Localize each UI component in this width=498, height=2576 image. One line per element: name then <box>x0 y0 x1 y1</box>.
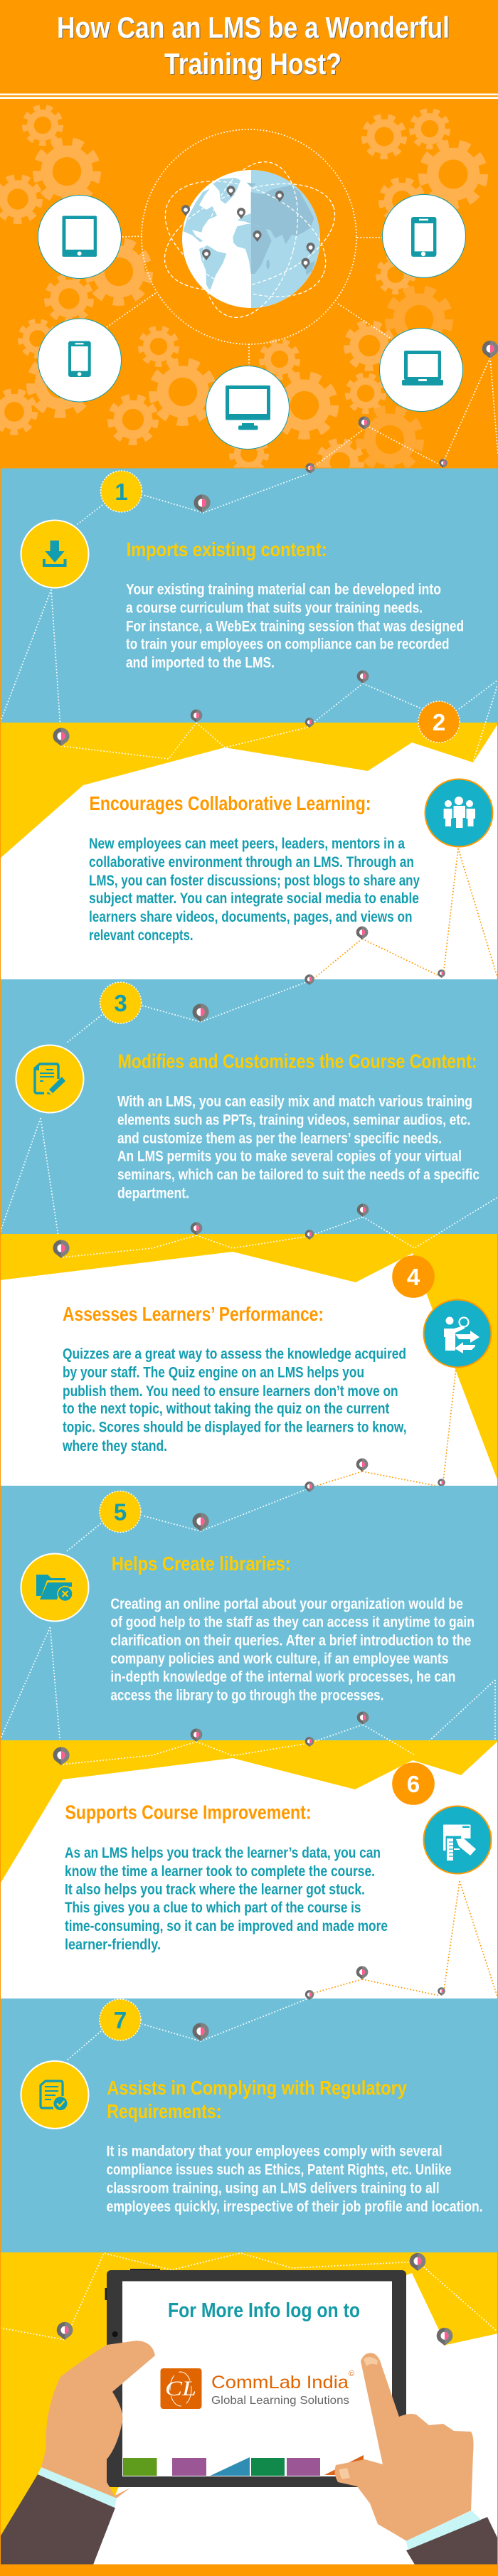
panel: section 3 modifies and customizes <box>0 974 498 1241</box>
body text: New employees can meet peers, leaders, mentors in a <box>89 836 405 852</box>
body text: time-consuming, so it can be improved and made more <box>65 1918 388 1934</box>
body text: collaborative environment through an LMS. Through an <box>89 854 414 871</box>
body text <box>126 582 464 671</box>
number 5 badge <box>100 1491 141 1532</box>
number 4 badge <box>393 1256 434 1297</box>
body text: As an LMS helps you track the learner’s data, you can <box>65 1845 381 1861</box>
number 6 badge <box>393 1763 434 1804</box>
panel: section 5 helps create libraries <box>0 1481 498 1755</box>
number 3 badge <box>100 982 142 1023</box>
number 1 badge: 1 <box>115 479 128 505</box>
body text: know the time a learner took to complete the course. <box>65 1863 375 1880</box>
body text <box>65 1845 388 1953</box>
logo <box>161 2368 354 2409</box>
body text: and imported to the LMS. <box>126 654 275 671</box>
logo: CL <box>165 2377 196 2400</box>
body text: Quizzes are a great way to assess the knowledge acquired <box>63 1346 406 1363</box>
panel: section 4 assesses performance <box>0 1197 498 1487</box>
body text: classroom training, using an LMS delivers training to all <box>107 2180 440 2196</box>
heading: Helps Create libraries: <box>112 1553 291 1575</box>
color bars <box>123 2455 385 2476</box>
left hand <box>0 2341 155 2565</box>
number 2 badge <box>418 701 460 743</box>
logo: CommLab India <box>211 2373 349 2393</box>
number 6 badge: 6 <box>407 1771 420 1797</box>
icon: document with check <box>21 2061 88 2129</box>
number 7 badge: 7 <box>114 2007 127 2033</box>
body text <box>110 1596 475 1704</box>
title: Training Host? <box>164 47 341 80</box>
body text: This gives you a clue to which part of the course is <box>65 1900 361 1916</box>
body text: department. <box>117 1185 189 1201</box>
icon: document and pencil <box>16 1045 84 1112</box>
heading: Encourages Collaborative Learning: <box>90 792 371 814</box>
panel: closing call to action <box>0 2252 498 2565</box>
icon: download <box>21 521 88 587</box>
icon: tablet circle <box>38 195 121 279</box>
icon: drawing board <box>424 1806 491 1873</box>
body text: access the library to go through the processes. <box>110 1687 383 1704</box>
body text <box>62 1346 406 1454</box>
panel: section 7 assists in complying <box>0 1990 498 2252</box>
body text: Your existing training material can be developed into <box>126 582 441 598</box>
panel: section 1 imports existing content <box>0 341 498 729</box>
body text: publish them. You need to ensure learners don’t move on <box>63 1383 398 1400</box>
number 7 badge <box>100 1999 141 2040</box>
tablet <box>105 2269 406 2487</box>
logo: Global Learning Solutions <box>211 2395 349 2407</box>
panel: section 6 supports course improvement <box>0 1712 498 1998</box>
number 1 badge <box>101 471 142 512</box>
body text: relevant concepts. <box>89 927 194 944</box>
body text: It is mandatory that your employees comply with several <box>107 2143 443 2159</box>
panel: section 2 collaborative learning <box>0 671 498 979</box>
body text: where they stand. <box>62 1438 167 1454</box>
icon: right phone circle <box>383 195 465 277</box>
globe <box>147 151 349 328</box>
right hand <box>335 2353 498 2565</box>
body text <box>117 1094 480 1201</box>
icon: person with arrows <box>424 1300 491 1367</box>
body text: LMS, you can foster discussions; post blogs to share any <box>89 873 420 889</box>
number 4 badge: 4 <box>407 1264 420 1290</box>
body text <box>107 2143 483 2215</box>
heading: Supports Course Improvement: <box>65 1801 312 1824</box>
title <box>57 11 450 80</box>
header band <box>0 0 498 468</box>
footer band <box>0 2565 498 2576</box>
body text: subject matter. You can integrate social media to enable <box>89 890 419 907</box>
body text: learner-friendly. <box>65 1937 161 1953</box>
heading: Requirements: <box>107 2100 221 2122</box>
call to action text: For More Info log on to <box>168 2299 360 2322</box>
icon: left phone circle <box>38 319 121 402</box>
heading <box>107 2077 407 2122</box>
logo: © <box>349 2370 354 2378</box>
globe orbit dotted ring and connectors <box>107 129 392 366</box>
icon: monitor circle <box>206 366 289 449</box>
icon: people <box>425 779 492 846</box>
heading: Assists in Complying with Regulatory <box>107 2077 407 2099</box>
body text: learners share videos, documents, pages, and views on <box>89 909 413 925</box>
body text: topic. Scores should be displayed for the learners to know, <box>63 1420 407 1435</box>
body text: It also helps you track where the learner got stuck. <box>65 1882 365 1898</box>
icon: laptop circle <box>380 329 462 411</box>
body text: to the next topic, without taking the quiz on the current <box>63 1401 389 1417</box>
number 3 badge: 3 <box>114 990 127 1016</box>
heading: Assesses Learners’ Performance: <box>63 1303 324 1325</box>
body text: a course curriculum that suits your training needs. <box>126 600 423 616</box>
heading: Imports existing content: <box>127 538 327 560</box>
number 2 badge: 2 <box>433 709 445 735</box>
body text <box>89 836 420 944</box>
icon: folder <box>21 1553 88 1622</box>
body text: by your staff. The Quiz engine on an LMS helps you <box>63 1364 364 1381</box>
background gears <box>0 107 484 484</box>
number 5 badge: 5 <box>114 1499 127 1525</box>
